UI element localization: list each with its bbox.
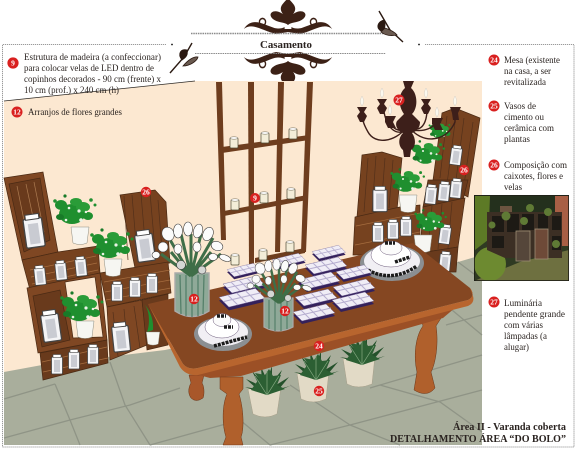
jars left composition <box>22 213 157 374</box>
note 25: vases: cimento ou <box>504 112 544 123</box>
marker 26 right <box>459 165 469 175</box>
cake right <box>360 241 424 281</box>
potted plants under table <box>245 336 385 417</box>
marker 12 small vase <box>280 306 290 316</box>
plants left composition <box>53 194 160 345</box>
note 25: vases: cerâmica com <box>504 123 555 134</box>
note 26: crates composition: Composição com <box>504 160 567 171</box>
note 9: wooden structure: copinhos decorados - 90 cm (frente) x <box>24 74 161 85</box>
marker 27 on chandelier <box>394 94 404 106</box>
chandelier <box>357 81 461 157</box>
note 26: crates composition: velas <box>504 182 522 193</box>
note 26: crates composition: caixotes, flores e <box>504 171 563 182</box>
photo: crate wall in garden <box>474 195 569 281</box>
note 9: wooden structure: Estrutura de madeira (a confeccionar) <box>24 52 161 63</box>
marker 25: 25 <box>315 387 323 396</box>
note 24: table: revitalizada <box>504 77 547 88</box>
footer caption <box>390 421 567 445</box>
marker 26 left <box>141 187 151 197</box>
note 27: chandelier: alugar) <box>504 342 529 353</box>
note 9: wooden structure: 9 <box>11 59 15 68</box>
cake left <box>194 314 252 351</box>
note 27: chandelier: 27 <box>490 298 498 307</box>
note 24: table: Mesa (existente <box>504 55 560 66</box>
note 27: chandelier: Luminária <box>504 298 543 309</box>
table <box>148 243 473 445</box>
note 27: chandelier: lâmpadas (a <box>504 331 548 342</box>
marker 12 small vase: 12 <box>281 307 289 316</box>
note 24: table: 24 <box>490 56 498 65</box>
note 25: vases: 25 <box>490 102 498 111</box>
favour boxes <box>219 245 375 324</box>
note 9: wooden structure: 10 cm (prof.) x 240 cm (h) <box>24 85 119 96</box>
note 12: flower arrangements: Arranjos de flores grandes <box>28 107 122 118</box>
note 25: vases <box>488 100 555 145</box>
note 26: crates composition: 26 <box>490 161 498 170</box>
note 24: table <box>488 54 560 88</box>
white top-left note background line <box>4 81 195 101</box>
note 27: chandelier: pendente grande <box>504 309 565 320</box>
footer caption: Área II - Varanda coberta <box>453 421 567 433</box>
icon: butterfly right <box>378 11 403 42</box>
vase and tulips large <box>152 222 232 317</box>
note 24: table: na casa, a ser <box>504 66 552 77</box>
marker 9 on trellis <box>250 193 260 203</box>
note 12: flower arrangements: 12 <box>13 108 21 117</box>
icon: butterfly left <box>170 43 198 73</box>
vase and tulips small <box>247 259 312 331</box>
crates right composition <box>353 108 480 272</box>
note 9: wooden structure <box>7 52 161 96</box>
floor tiles <box>4 255 482 445</box>
note 27: chandelier: com várias <box>504 320 543 331</box>
marker 25 <box>314 386 324 396</box>
marker 24: 24 <box>315 342 323 351</box>
marker 12 large vase: 12 <box>190 295 198 304</box>
jars right composition <box>372 145 463 272</box>
wooden trellis structure <box>216 82 313 265</box>
note 26: crates composition <box>488 160 567 193</box>
marker 26 right: 26 <box>460 166 468 175</box>
header ornament <box>191 0 386 88</box>
marker 24 <box>314 341 324 351</box>
footer caption: DETALHAMENTO ÁREA “DO BOLO” <box>390 433 566 445</box>
marker 12 large vase <box>189 294 199 304</box>
note 27: chandelier <box>488 296 565 353</box>
crates left composition <box>4 172 171 380</box>
marker 26 left: 26 <box>142 188 150 197</box>
number 9 on trellis: 9 <box>253 194 257 202</box>
background wall <box>4 81 482 380</box>
marker 27 on chandelier: 27 <box>395 96 403 105</box>
plants right composition <box>390 122 452 253</box>
heading: Casamento: Casamento <box>260 39 312 51</box>
note 25: vases: Vasos de <box>504 101 536 112</box>
note 9: wooden structure: para colocar velas de LED dentro de <box>24 63 154 74</box>
note 25: vases: plantas <box>504 134 530 145</box>
